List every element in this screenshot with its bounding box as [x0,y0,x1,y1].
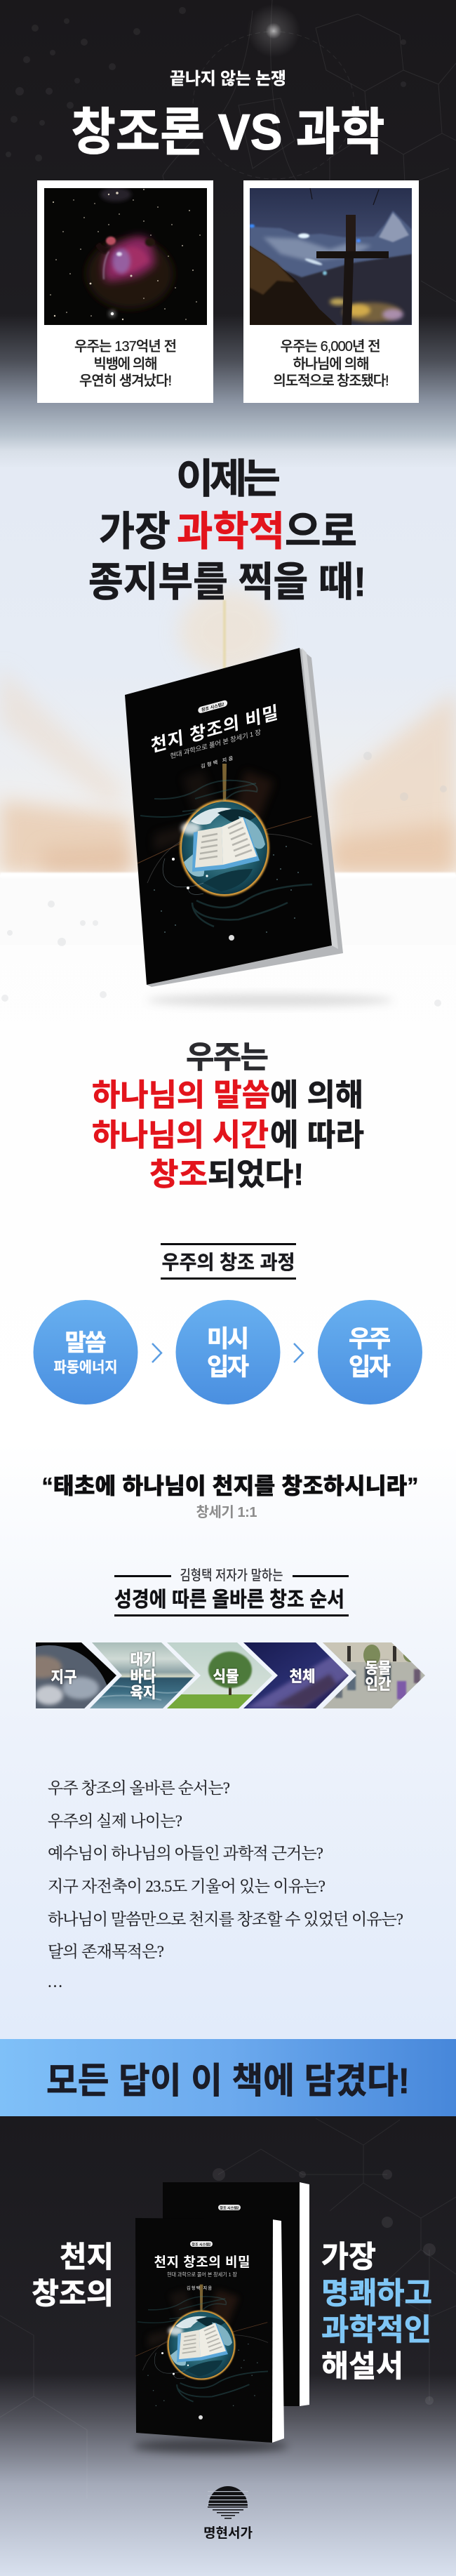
text block: questions: 하나님이 말씀만으로 천지를 창조할 수 있었던 이유는? [48,1911,403,1928]
headline: creation statement: 에 따라 [270,1118,364,1153]
book cover text: 창조 시스템2 [192,2242,211,2248]
network backdrop [0,2118,456,2499]
chevron: animals and humans: 동물 [365,1659,391,1677]
quote: genesis: “태초에 하나님이 천지를 창조하시니라” [42,1473,418,1499]
heading: creation order: 성경에 따른 올바른 창조 순서 [114,1588,344,1612]
text block: questions: 지구 자전축이 23.5도 기울어 있는 이유는? [48,1878,326,1895]
image: cross on mountain [249,188,412,325]
arrow [294,1343,303,1362]
headline: scientific: 과학적 [177,509,285,555]
heading: creation process: 우주의 창조 과정 [161,1252,295,1273]
text block: questions: 우주의 실제 나이는? [48,1812,182,1830]
headline: creation statement: 에 의해 [270,1078,363,1113]
quote: genesis: 창세기 1:1 [196,1504,257,1520]
chevron: sky sea land: 육지 [130,1684,156,1701]
book cover text [149,686,281,783]
chevron: stars [242,1642,351,1708]
text: right headline [321,2240,432,2384]
banner: all answers [0,2039,456,2116]
book: front copy [133,2218,288,2453]
panel: closing section [0,2116,456,2576]
chevron: sky sea land: 대기 [130,1651,156,1668]
book cover text: 현대 과학으로 풀어 본 창세기 1 장 [167,2271,237,2278]
heading: creation process [161,1243,296,1280]
book cover art [138,764,312,933]
book cover text: 김형택 지음 [201,755,234,769]
text: right headline: 해설서 [321,2350,403,2384]
caption: 우연히 생겨났다! [79,373,172,389]
step: universe particles [318,1300,422,1405]
caption [274,338,389,389]
headline: creation statement [92,1040,364,1192]
chevron: animals and humans [321,1642,427,1708]
step: word: 파동에너지 [53,1360,118,1376]
chevron strip: creation order [36,1642,425,1708]
heading: creation order [114,1567,349,1616]
step: universe particles: 입자 [349,1354,391,1381]
headline: scientific: 이제는 [176,456,281,502]
caption: 우주는 6,000년 전 [281,338,380,354]
book cover art [135,2285,268,2406]
chevron: earth [36,1642,116,1708]
headline: creation statement: 되었다! [208,1157,304,1192]
card: big bang [37,180,213,403]
step: micro particles: 미시 [207,1326,249,1353]
text: right headline: 명쾌하고 [321,2277,432,2311]
step: micro particles [175,1300,281,1405]
step: word [34,1300,138,1405]
text: left headline: 천지 [60,2240,114,2273]
book cover text: 현대 과학으로 풀어 본 창세기 1 장 [170,729,262,761]
step: universe particles: 우주 [349,1326,391,1353]
caption: 빅뱅에 의해 [94,356,157,372]
step: micro particles: 입자 [207,1354,249,1381]
headline: creation statement: 창조 [149,1157,208,1192]
book cover text [154,2241,250,2291]
text: right headline: 가장 [321,2240,376,2274]
title: 창조론 VS 과학 [72,105,384,161]
book logo [199,2415,203,2419]
chevron: plants [166,1642,274,1708]
subtitle: 끝나지 않는 논쟁 [170,69,286,88]
headline: creation statement: 우주는 [186,1040,269,1075]
diagram: creation process [34,1300,422,1405]
step: word: 말씀 [65,1329,107,1355]
panel: debate hero [6,0,456,403]
text: right headline: 과학적인 [321,2313,431,2347]
arrow [152,1343,161,1362]
book cover text: 천지 창조의 비밀 [154,2255,250,2270]
heading: creation order: 김형택 저자가 말하는 [180,1567,283,1584]
chevron: animals and humans: 인간 [365,1675,391,1693]
caption: 하나님에 의해 [293,356,369,372]
network backdrop [6,0,456,302]
text: left headline: 창조의 [32,2277,114,2310]
book: back copy [163,2182,309,2406]
logo: publisher [203,2486,253,2541]
caption: 우주는 137억년 전 [74,338,177,354]
headline: creation statement: 하나님의 말씀 [92,1078,270,1113]
book logo [229,935,234,941]
chevron: sky sea land [88,1642,197,1708]
headline: scientific: 종지부를 찍을 때! [88,559,366,605]
text block: questions: 예수님이 하나님의 아들인 과학적 근거는? [48,1845,323,1862]
text block: questions [48,1779,403,1991]
headline: scientific: 가장 [99,509,170,555]
book: back copy: 창조 시스템2 [220,2205,239,2211]
image: orion nebula [44,187,207,325]
book cover text: 천지 창조의 비밀 [150,703,279,757]
chevron: stars: 천체 [289,1668,316,1685]
book: tilted cover [125,648,393,1007]
headline: scientific: 으로 [285,509,357,555]
banner: all answers: 모든 답이 이 책에 담겼다! [46,2061,410,2101]
chevron: plants: 식물 [213,1668,239,1685]
book cover text: 김형택 지음 [187,2285,212,2291]
chevron: earth: 지구 [51,1668,77,1686]
card: divine creation [243,180,419,403]
caption: 의도적으로 창조됐다! [274,373,389,389]
logo: publisher: 명현서가 [203,2525,253,2541]
book cover text: 창조 시스템2 [201,701,224,713]
text block: questions: 달의 존재목적은? [48,1943,164,1960]
text block: questions: ... [48,1973,62,1991]
chevron: sky sea land: 바다 [130,1668,156,1685]
headline: scientific [88,456,366,605]
text block: questions: 우주 창조의 올바른 순서는? [48,1779,230,1797]
text: left headline [32,2240,114,2310]
quote: genesis [42,1473,418,1520]
headline: creation statement: 하나님의 시간 [92,1118,269,1153]
caption [74,338,177,389]
panel: light rays background [0,590,456,1007]
